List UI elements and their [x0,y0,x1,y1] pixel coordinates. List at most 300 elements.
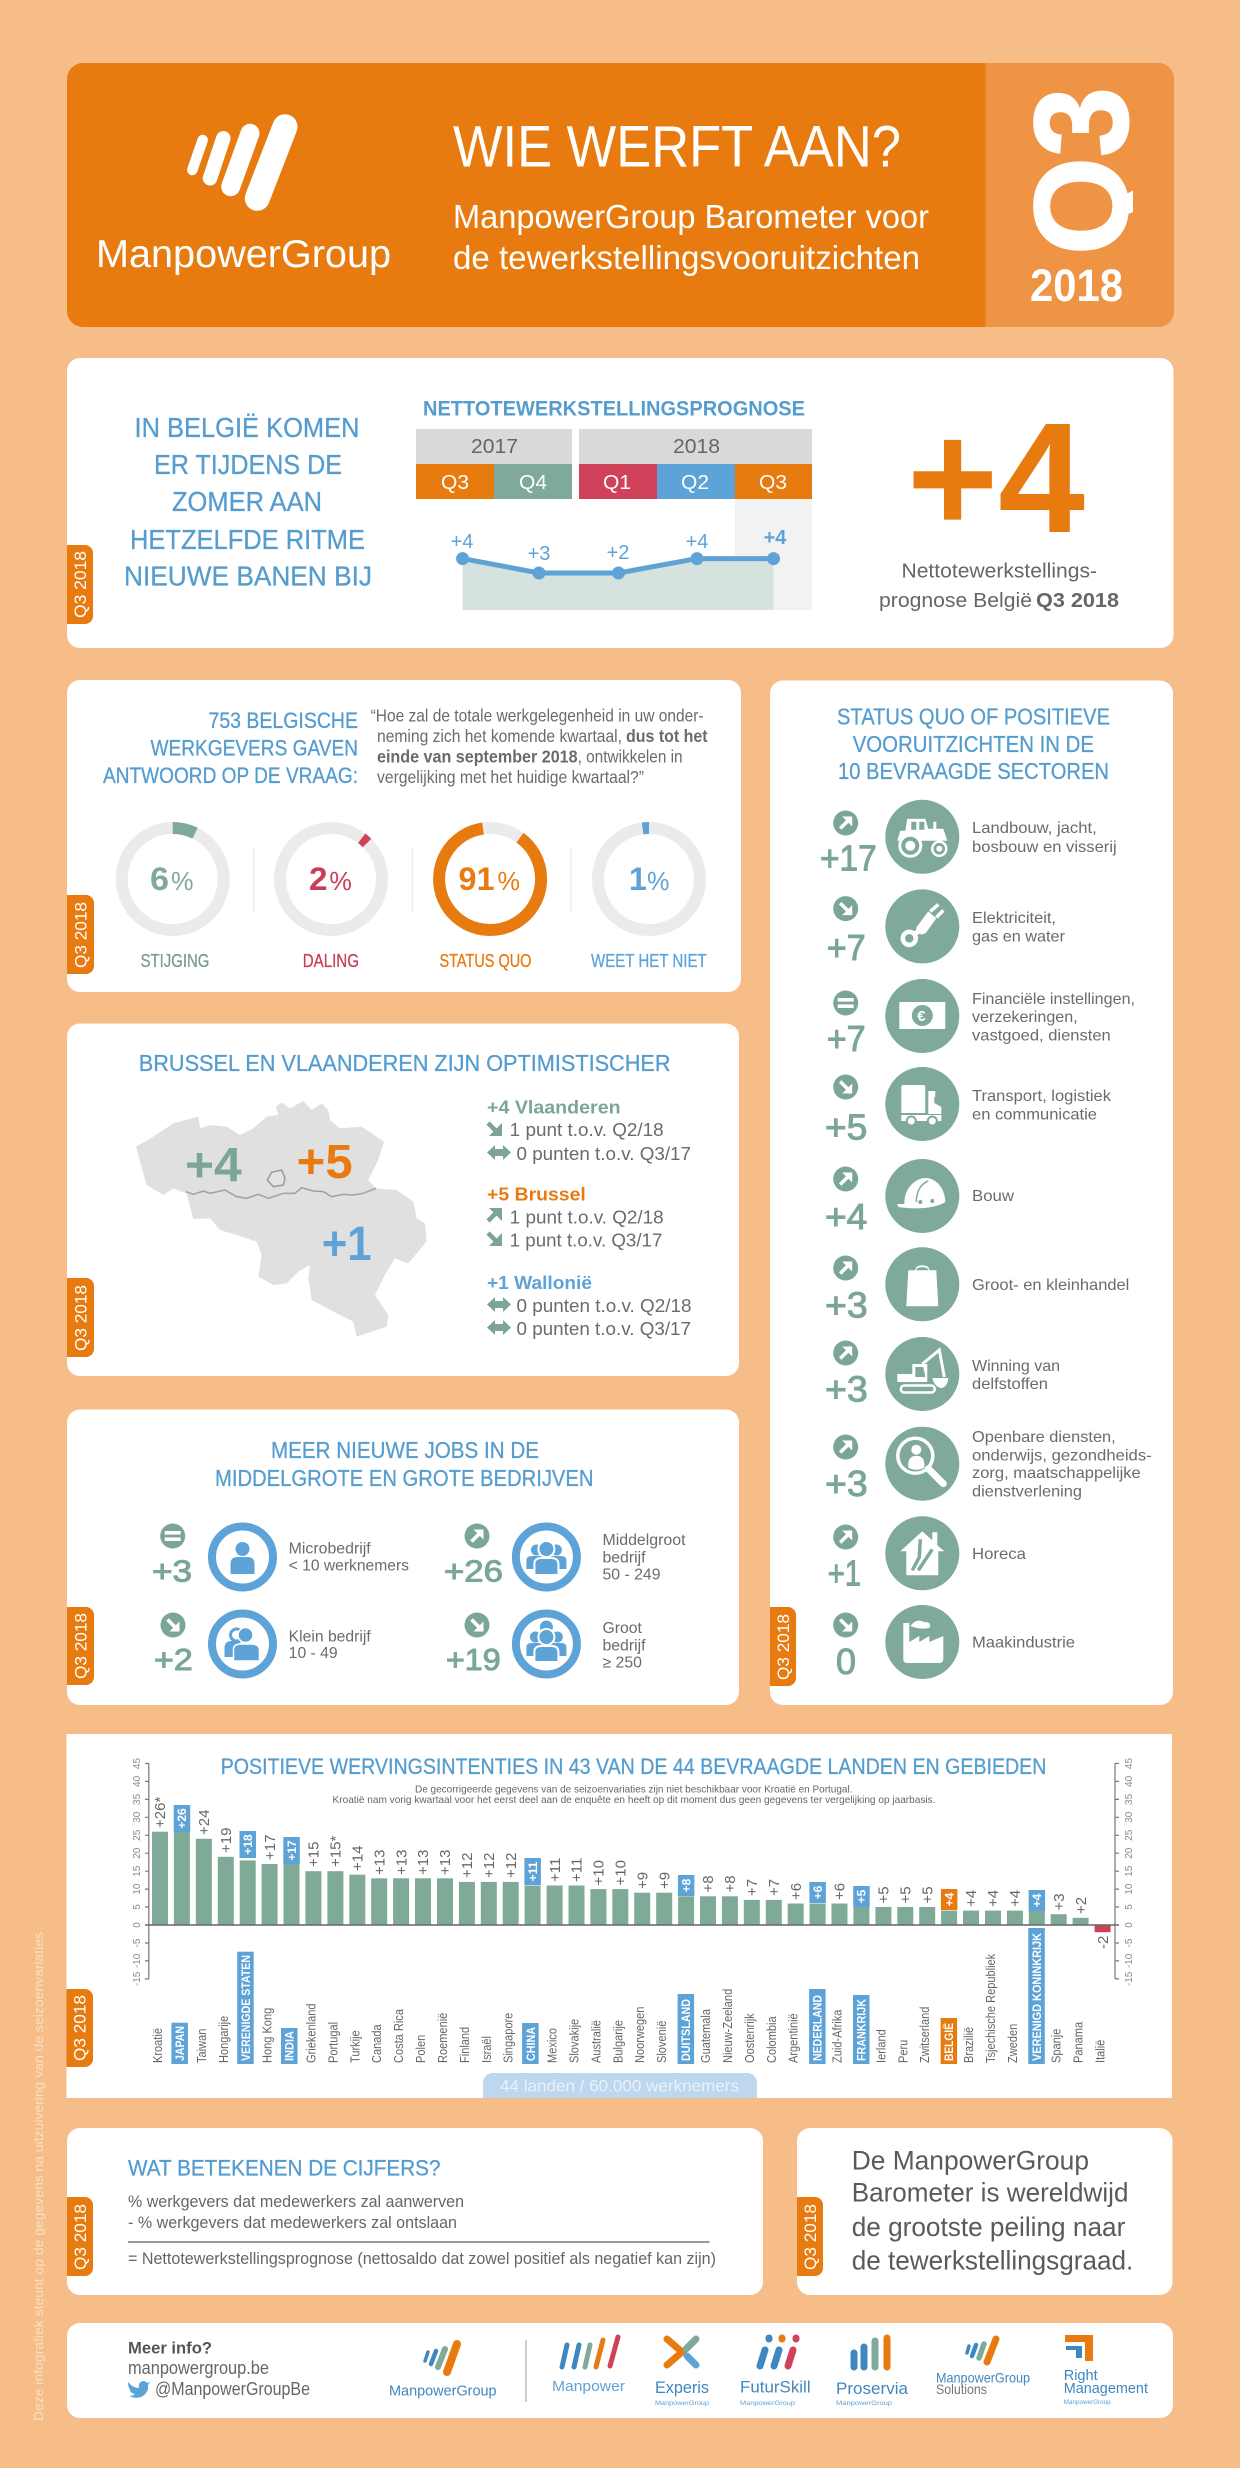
value labels: +26* [152,1797,169,1828]
highlight value boxes: +8 [679,1878,693,1892]
text: Wallonië: 0 punten t.o.v. Q3/17 [516,1319,691,1339]
country labels: Bulgarije [610,2020,626,2063]
subtitle: de tewerkstellingsvooruitzichten [453,239,920,276]
value labels: +6 [788,1883,805,1900]
donut: status quo: 91 [458,861,494,897]
line chart: +4 [764,527,787,549]
button: 44 landen: 44 landen / 60.000 werknemers [500,2077,739,2096]
country labels [150,1953,1108,2063]
statement text: de tewerkstellingsgraad. [852,2245,1133,2275]
donut: daling: DALING [303,951,359,971]
value labels: +13 [415,1850,432,1875]
logo wordmark: ManpowerGroup [96,233,391,276]
sector: maakindustrie: Maakindustrie [972,1635,1075,1652]
heading: in België: IN BELGIË KOMEN [134,412,360,443]
statement text: De ManpowerGroup [852,2145,1089,2175]
sector: transport: en communicatie [972,1106,1097,1123]
heading: 10 BEVRAAGDE SECTOREN [838,758,1109,784]
logo: Right Management [1064,2335,1149,2406]
item: klein bedrijf: 10 - 49 [289,1645,338,1662]
donut: status quo [439,828,541,971]
heading: in België: ZOMER AAN [172,486,322,517]
text: Vlaanderen: 1 punt t.o.v. Q2/18 [510,1120,664,1140]
donut: status quo: STATUS QUO [440,951,531,971]
quarter tab [67,895,94,974]
value labels: +5 [898,1886,914,1904]
country labels: Portugal [326,2022,341,2063]
logo: ManpowerGroup: ManpowerGroup [389,2383,497,2400]
left axis: 20 [132,1847,143,1859]
highlight value boxes: +5 [855,1889,869,1903]
sector: handel [825,1247,1129,1326]
line chart: +3 [528,543,550,565]
sector: elektriciteit: Elektriciteit, [972,910,1056,927]
right axis: 25 [1124,1829,1135,1841]
map of Belgium: +4 [185,1140,242,1193]
text: Brussel: 1 punt t.o.v. Q2/18 [510,1207,664,1227]
panel: survey answers [67,680,741,992]
logo: ManpowerGroup Solutions [936,2339,1030,2397]
chart note [332,1784,936,1806]
right axis: 45 [1124,1758,1135,1769]
value labels: +10 [612,1860,630,1886]
right axis [1115,1758,1135,1986]
value labels: +13 [437,1850,454,1875]
donut: daling: 2 [309,861,328,897]
country labels: Kroatië [150,2028,165,2063]
quarter timeline table [416,429,812,499]
country labels: Guatemala [698,2009,713,2063]
year label: 2018 [1030,260,1123,311]
header banner [67,63,1174,327]
panel: national outlook [67,358,1174,648]
chart title: POSITIEVE WERVINGSINTENTIES IN 43 VAN DE 44 BEVRAAGDE LANDEN EN GEBIEDEN [221,1754,1046,1779]
highlighted country labels: FRANKRIJK [854,1999,868,2061]
right axis: 10 [1124,1883,1135,1895]
quarter timeline table: Q4 [519,472,547,494]
right axis: 0 [1124,1922,1135,1928]
country labels: Canada [369,2024,384,2063]
line chart: +4 [451,531,473,553]
button: 44 landen [483,2073,757,2098]
survey question [371,706,708,787]
heading: in België: ER TIJDENS DE [154,449,342,480]
value labels: +4 [963,1890,980,1907]
caption: Nettotewerkstellings- [902,560,1097,582]
logo: ManpowerGroup Solutions: ManpowerGroup [936,2370,1030,2386]
text: Wallonië [487,1273,692,1339]
donut: stijging: 6 [150,861,169,897]
sector: transport [825,1067,1112,1148]
line chart: +4 [686,531,708,553]
heading [837,704,1110,784]
heading: employers: 753 BELGISCHE [208,708,358,733]
value labels: +2 [1073,1897,1090,1914]
heading: in België [124,412,372,592]
highlight value boxes: +17 [285,1840,299,1861]
item: microbedrijf: +3 [152,1553,192,1588]
value labels: +24 [196,1810,213,1835]
heading: VOORUITZICHTEN IN DE [853,731,1094,757]
survey question: , ontwikkelen in [578,747,683,767]
text: Brussel [487,1185,664,1251]
contact info: @ManpowerGroupBe [155,2379,310,2399]
logo: FuturSkill: ManpowerGroup [740,2400,795,2407]
right axis: 5 [1124,1904,1135,1910]
logo: Proservia: ManpowerGroup [836,2400,892,2407]
item: klein bedrijf: Klein bedrijf [289,1629,371,1646]
value labels: +12 [481,1853,498,1878]
highlight value boxes: +4 [942,1892,956,1906]
heading: WAT BETEKENEN DE CIJFERS? [128,2156,440,2181]
sector: landbouw: +17 [820,838,877,879]
sector: winning: delfstoffen [972,1376,1048,1393]
value labels: +6 [832,1883,848,1900]
panel: sectors [770,680,1173,1705]
value labels: +11 [568,1858,586,1882]
quarter timeline table: Q3 [759,472,787,494]
country labels: Hongarije [216,2015,231,2063]
subtitle: ManpowerGroup Barometer voor [453,198,929,235]
sector: transport: +5 [825,1107,867,1148]
highlighted country labels: NEDERLAND [810,1995,824,2061]
value labels: +12 [459,1853,476,1878]
quarter tab [67,2197,93,2276]
statement text: de grootste peiling naar [852,2212,1125,2242]
sector: maakindustrie: 0 [836,1641,856,1682]
country labels: Costa Rica [391,2009,406,2063]
sector: bouw: +4 [825,1196,867,1237]
country labels: Australië [589,2020,604,2063]
item: microbedrijf: < 10 werknemers [289,1558,409,1575]
caption: Q3 2018 [1036,590,1119,612]
sector: financiële instellingen: verzekeringen, [972,1009,1078,1026]
sector: winning: Winning van [972,1358,1060,1375]
right axis: 20 [1124,1847,1135,1859]
quarter tab: Q3 2018 [72,551,90,618]
contact info: manpowergroup.be [128,2358,269,2378]
highlight value boxes [174,1805,1045,1911]
country labels: Polen [413,2035,428,2063]
country labels: Finland [457,2027,472,2063]
right axis: 30 [1124,1811,1135,1823]
donut: daling [280,828,382,971]
sector: elektriciteit [827,889,1066,968]
left axis: 40 [132,1775,143,1787]
sector: landbouw: Landbouw, jacht, [972,820,1097,837]
map of Belgium [136,1101,427,1337]
sector: openbare diensten: dienstverlening [972,1484,1082,1501]
heading: employers: WERKGEVERS GAVEN [150,736,358,761]
item: middelgroot bedrijf: bedrijf [602,1550,646,1567]
country labels: Roemenië [435,2012,450,2063]
formula: = Nettotewerkstellingsprognose (nettosaldo dat zowel positief als negatief kan zijn) [128,2250,716,2268]
donut: weet het niet: 1 [629,861,647,897]
sector: openbare diensten: onderwijs, gezondheids- [972,1448,1152,1465]
country labels: Turkije [347,2030,363,2063]
quarter timeline table: 2017 [471,436,518,458]
country labels: Argentinië [786,2013,801,2063]
quarter tab: Q3 2018 [802,2204,820,2270]
value labels: +7 [744,1879,761,1896]
survey question: neming zich het komende kwartaal, [377,726,622,746]
quarter tab: Q3 2018 [72,1613,90,1679]
value labels: +14 [350,1846,366,1871]
sector: horeca: +1 [828,1553,861,1594]
contact info [128,2338,310,2399]
country labels: Singapore [501,2012,516,2063]
country labels: Oostenrijk [742,2012,757,2063]
bars [152,1832,1111,1932]
highlight value boxes: +26 [175,1808,189,1829]
chart note: Kroatië nam vorig kwartaal voor het eerst deel aan de enquête en heeft op dit moment dus geen gegevens ter vergelijking op jaarbasis. [332,1794,936,1806]
heading: BRUSSEL EN VLAANDEREN ZIJN OPTIMISTISCHER [139,1050,671,1076]
survey question: dus tot het [626,726,708,746]
donut: weet het niet: % [647,866,670,896]
quarter tab: Q3 2018 [72,2204,90,2270]
sector: bouw: Bouw [972,1188,1014,1205]
highlighted country labels: JAPAN [173,2026,187,2061]
value labels: +15 [306,1842,322,1867]
item: microbedrijf [152,1522,409,1592]
quarter timeline table: Q3 [441,472,469,494]
text: Wallonië: 0 punten t.o.v. Q2/18 [516,1296,692,1316]
quarter tab [67,545,93,624]
quarter tab [797,2197,823,2276]
country labels: Zuid-Afrika [830,2009,845,2063]
logo: Right Management: Right [1064,2367,1098,2384]
quarter timeline table: 2018 [673,436,720,458]
quarter tab: Q3 2018 [775,1614,793,1680]
survey question: vergelijking met het huidige kwartaal?” [377,767,644,787]
heading: MIDDELGROTE EN GROTE BEDRIJVEN [215,1465,594,1491]
sector: landbouw [820,800,1117,879]
sector: financiële instellingen: Financiële instellingen, [972,991,1135,1008]
highlighted country labels: DUITSLAND [679,1999,693,2061]
sector: transport: Transport, logistiek [972,1088,1112,1105]
subtitle [453,198,929,276]
value labels: +13 [394,1850,410,1875]
value labels: +4 [985,1890,1002,1907]
sector: landbouw: bosbouw en visserij [972,839,1117,856]
country labels: Colombia [764,2016,779,2063]
quarter tab [67,1607,94,1685]
zero line [145,1924,1119,1926]
item: klein bedrijf [154,1612,371,1677]
line chart: +2 [607,542,629,564]
item: microbedrijf: Microbedrijf [289,1541,371,1558]
sector: financiële instellingen: € [917,1008,926,1025]
formula: % werkgevers dat medewerkers zal aanwerven [128,2193,464,2211]
value labels [152,1797,1112,1949]
sector: openbare diensten [825,1427,1152,1504]
item: middelgroot bedrijf: +26 [444,1553,503,1588]
quarter tab: Q3 2018 [72,1285,90,1351]
country labels: Zweden [1005,2024,1020,2063]
text: Vlaanderen: +4 Vlaanderen [487,1098,621,1118]
left axis: -15 [132,1971,143,1986]
highlight value boxes: +6 [811,1885,825,1899]
panel: barometer statement [797,2128,1172,2295]
country labels: Panama [1071,2022,1086,2063]
item: groot bedrijf: +19 [446,1642,501,1677]
quarter tab [67,1278,94,1357]
right axis: 35 [1124,1793,1135,1805]
quarter tab: Q3 2018 [72,1995,90,2061]
heading: MEER NIEUWE JOBS IN DE [271,1437,539,1463]
country labels: Noorwegen [632,2007,647,2063]
value labels: +9 [656,1872,674,1889]
heading: in België: HETZELFDE RITME [130,524,365,555]
country labels: Hong Kong [260,2008,275,2063]
value labels: +5 [920,1886,936,1904]
item: middelgroot bedrijf: Middelgroot [602,1532,686,1549]
heading: in België: NIEUWE BANEN BIJ [124,560,372,592]
statement text: Barometer is wereldwijd [852,2178,1128,2208]
country labels: Slovenië [654,2020,669,2063]
heading [215,1437,594,1491]
logo: Experis [655,2339,709,2407]
item: klein bedrijf: +2 [154,1642,193,1677]
value labels: +7 [766,1879,783,1896]
country labels: Ierland [874,2029,889,2063]
caption: prognose België [879,590,1032,612]
value labels: +4 [1007,1890,1024,1907]
country labels: Tsjechische Republiek [983,1953,998,2063]
value labels: +8 [700,1875,717,1892]
survey question: “Hoe zal de totale werkgelegenheid in uw onder- [371,706,704,726]
country labels: Griekenland [304,2003,319,2063]
sector: bouw [825,1159,1014,1237]
value labels: -2 [1095,1936,1112,1949]
quarter label: Q3 [1008,87,1156,255]
text: Vlaanderen: 0 punten t.o.v. Q3/17 [516,1144,691,1164]
donut: daling: % [329,866,352,896]
quarter timeline table: Q1 [603,472,631,494]
survey question: einde van september 2018 [377,747,578,767]
value labels: +5 [876,1886,892,1904]
sector: financiële instellingen: vastgoed, diensten [972,1028,1111,1045]
text: Brussel: 1 punt t.o.v. Q3/17 [510,1231,662,1251]
country labels: Slovakije [567,2019,582,2063]
sector: openbare diensten: +3 [825,1463,868,1504]
highlighted country labels: VERENIGD KONINKRIJK [1030,1933,1044,2061]
panel: countries chart [66,1734,1172,2098]
item: middelgroot bedrijf: 50 - 249 [602,1567,660,1584]
country labels: Taiwan [194,2029,209,2063]
sector: winning [825,1337,1060,1411]
chart note: De gecorrigeerde gegevens van de seizoenvariaties zijn niet beschikbaar voor Kroatië en Portugal. [415,1784,852,1796]
logo: Proservia: Proservia [836,2379,909,2398]
value labels: +8 [722,1875,739,1892]
highlighted country labels: VERENIGDE STATEN [239,1955,253,2061]
left axis: 25 [132,1829,143,1841]
left axis: -5 [132,1938,143,1947]
line chart [451,499,812,610]
panel: regions [67,1024,739,1376]
highlight value boxes: +4 [1030,1893,1044,1907]
value labels: +12 [503,1853,520,1878]
highlighted country labels: CHINA [524,2027,538,2061]
right axis: -15 [1124,1971,1135,1986]
donut: weet het niet: WEET HET NIET [591,951,707,971]
value labels: +13 [372,1850,388,1875]
value labels: +15* [328,1836,344,1867]
country labels: Zwitserland [917,2007,932,2063]
logo: Manpower [552,2337,625,2395]
donut: status quo: % [498,866,520,896]
caption [879,560,1119,612]
sector: openbare diensten: zorg, maatschappelijke [972,1465,1141,1482]
value labels: +11 [547,1858,564,1882]
country labels: Israël [479,2036,494,2063]
panel: meaning of the figures [67,2128,763,2295]
heading: employers [103,708,358,788]
country labels: Spanje [1049,2028,1064,2063]
donut: weet het niet [591,828,707,971]
logo: ManpowerGroup Solutions: Solutions [936,2381,987,2397]
right axis: 15 [1124,1865,1135,1877]
item: groot bedrijf [446,1612,646,1677]
item: groot bedrijf: ≥ 250 [602,1655,642,1672]
value labels: +3 [1051,1893,1068,1910]
sector: horeca: Horeca [972,1546,1026,1563]
quarter tab: Q3 2018 [72,902,90,968]
sector: financiële instellingen [827,979,1135,1059]
sector: elektriciteit: +7 [827,927,866,968]
panel: company size [67,1410,739,1705]
contact info: Meer info? [128,2338,212,2357]
right axis: 40 [1124,1775,1135,1787]
title: WIE WERFT AAN? [453,114,901,180]
sector: openbare diensten: Openbare diensten, [972,1429,1116,1446]
heading: employers: ANTWOORD OP DE VRAAG: [103,763,358,788]
logo: FuturSkill [740,2338,811,2407]
highlight value boxes: +18 [241,1834,255,1855]
sector: handel: +3 [825,1285,868,1326]
left axis: 30 [132,1811,143,1823]
country labels: Peru [895,2040,911,2063]
logo: ManpowerGroup [389,2344,497,2400]
value labels: +10 [590,1860,608,1886]
big number +4: +4 [907,391,1085,566]
quarter timeline table: Q2 [681,472,709,494]
country labels: Nieuw-Zeeland [720,1989,735,2063]
logo: Experis: Experis [655,2378,709,2397]
left axis: 45 [132,1758,143,1769]
donut: stijging [122,828,224,971]
value labels: +19 [218,1828,235,1853]
country labels: Mexico [545,2028,560,2063]
left axis: 15 [132,1865,143,1877]
logo: Proservia [836,2338,909,2407]
value labels: +9 [634,1872,652,1889]
dividers [254,847,571,912]
map of Belgium: +5 [297,1136,353,1189]
left axis: 5 [132,1904,143,1910]
sector: winning: +3 [825,1369,868,1410]
map of Belgium: +1 [322,1218,372,1271]
formula [128,2193,716,2268]
item: groot bedrijf: Groot [602,1620,643,1637]
logo: Manpower: Manpower [552,2378,625,2395]
text: Wallonië: +1 Wallonië [487,1273,592,1293]
left axis: -10 [132,1953,143,1968]
icon: ManpowerGroup logo [192,127,285,198]
country labels: Brazilië [961,2027,976,2063]
left axis: 0 [132,1922,143,1928]
sector: financiële instellingen: +7 [827,1018,866,1059]
